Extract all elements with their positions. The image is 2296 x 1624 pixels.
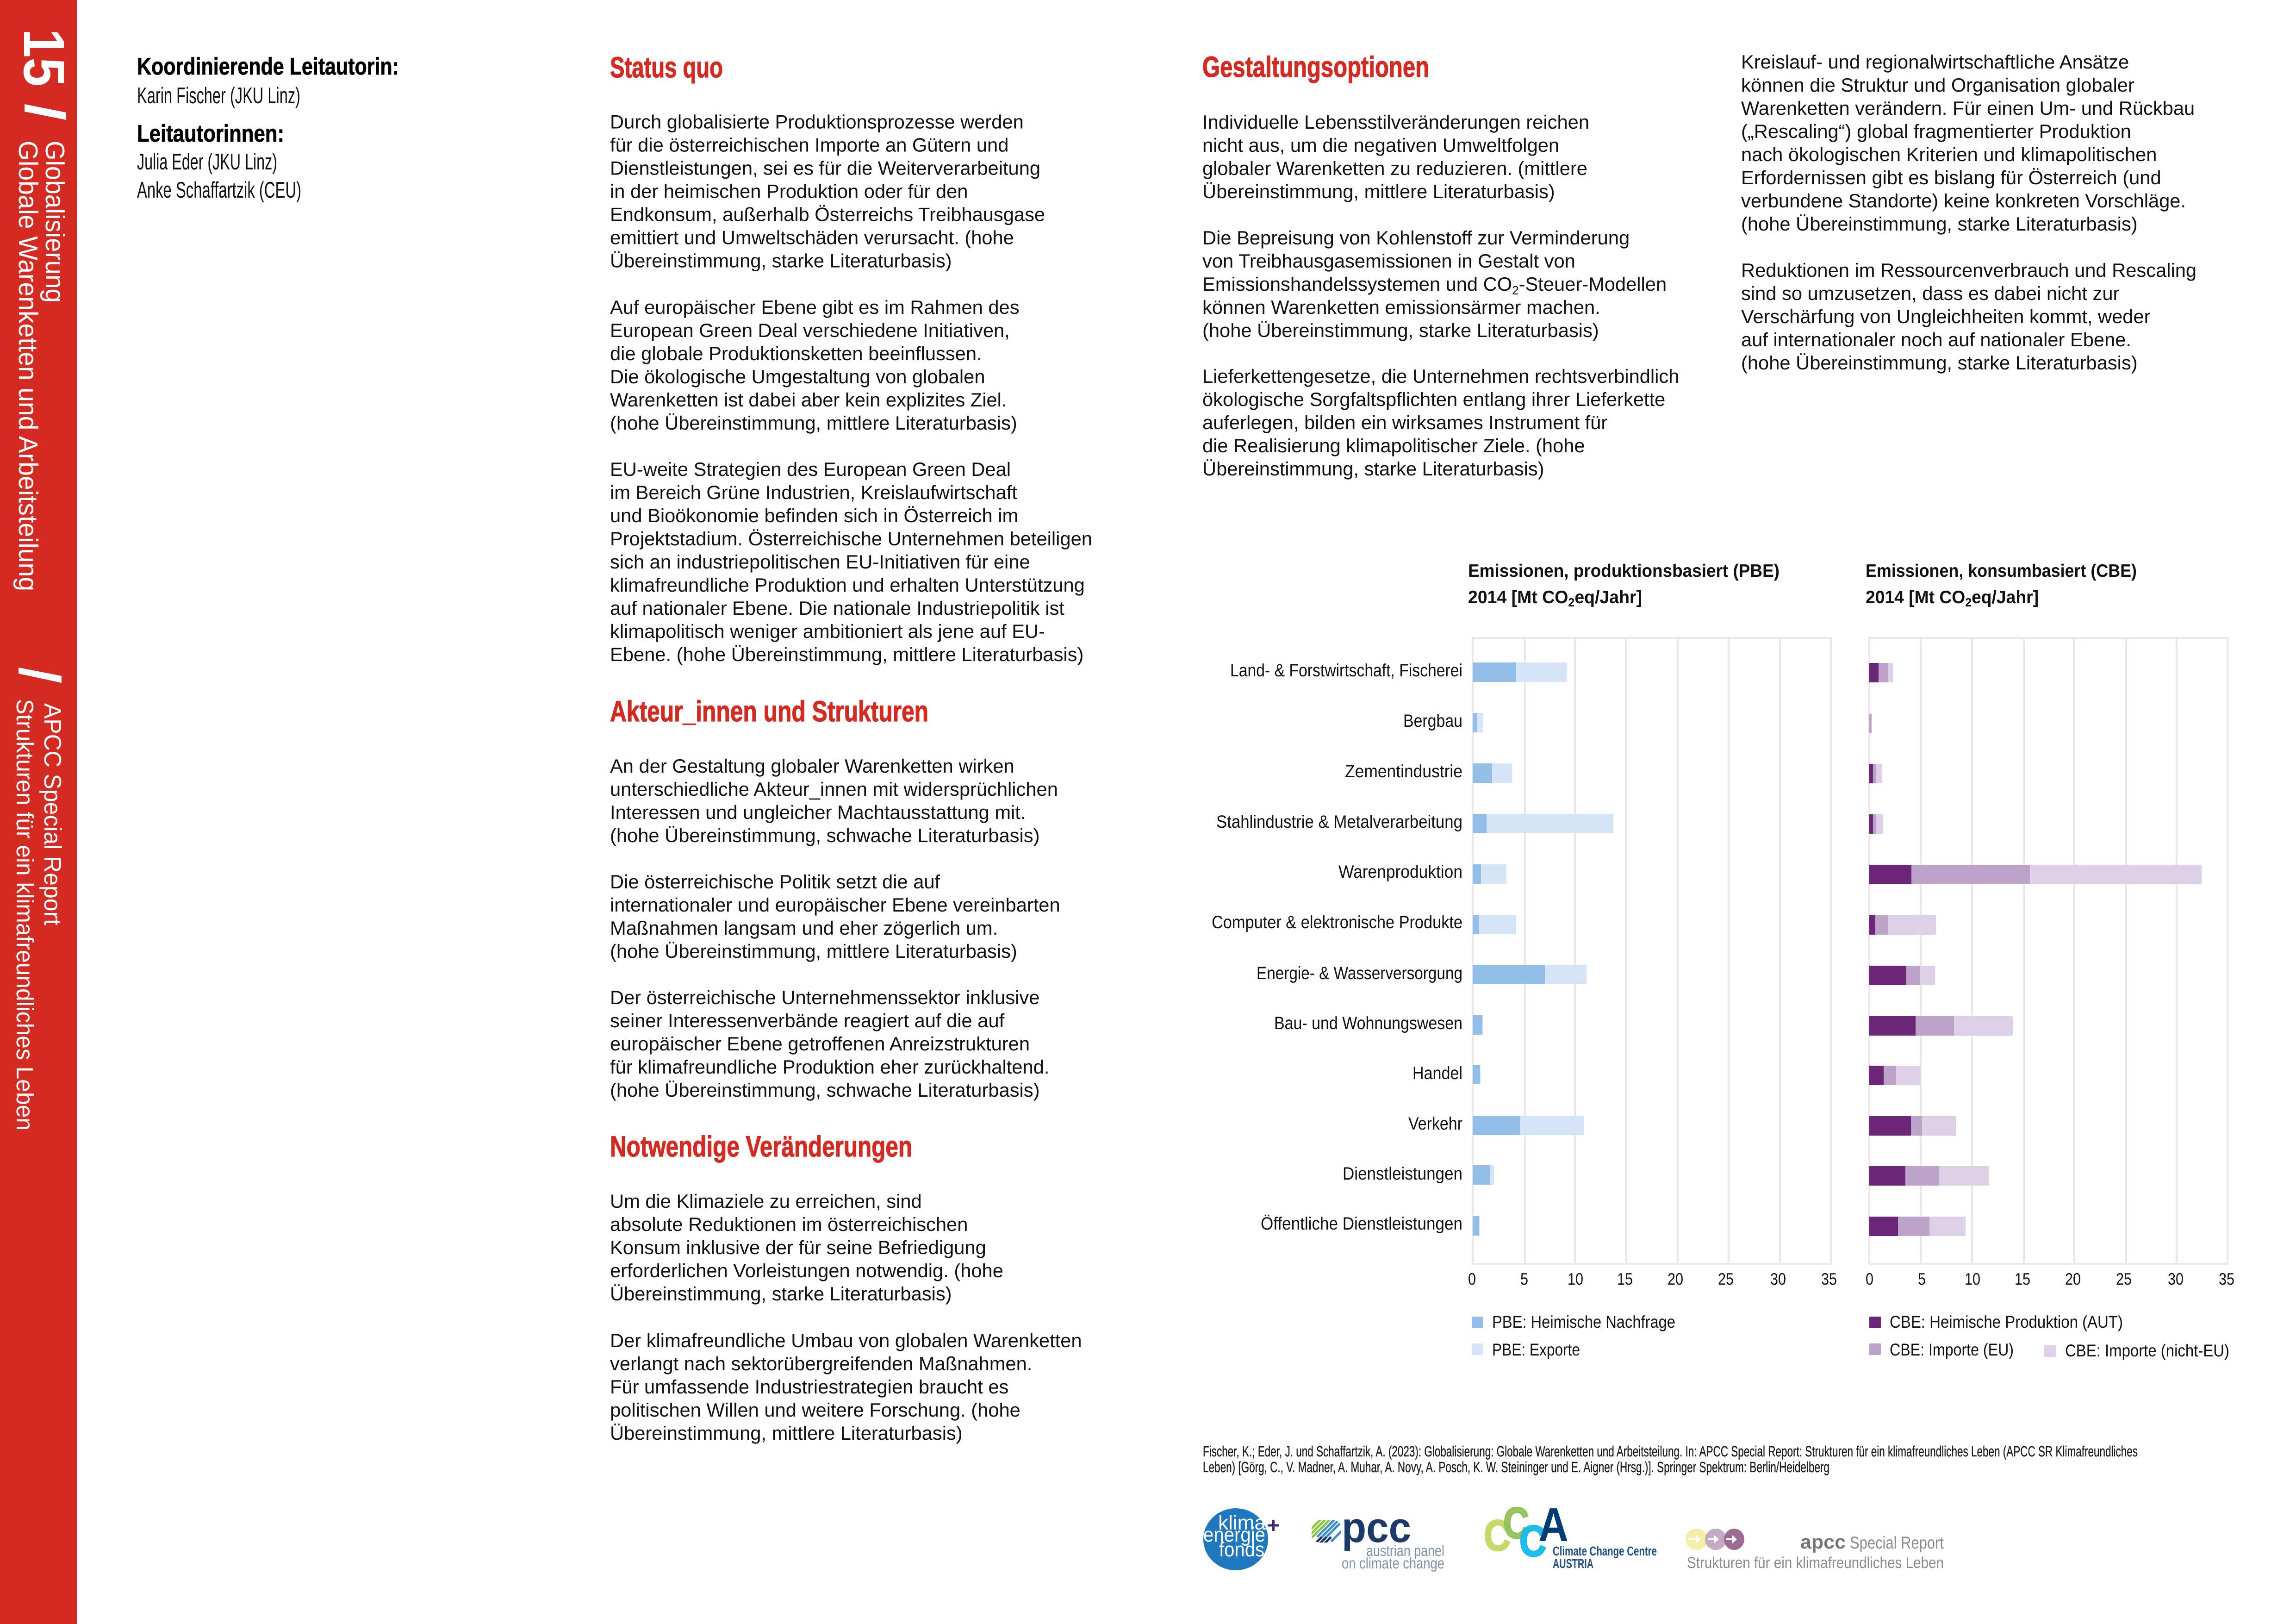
PBE legend: PBE: Heimische Nachfrage	[1492, 1312, 1675, 1331]
text block: circular economy paragraph: Erfordernissen gibt es bislang für Österreich (und	[1741, 167, 2161, 188]
text block: rescaling paragraph: auf internationaler noch auf nationaler Ebene.	[1741, 329, 2131, 350]
text block: actors paragraph 3: für klimafreundliche Produktion eher zurückhaltend.	[610, 1056, 1049, 1078]
PBE axis ticks: 35	[1821, 1269, 1837, 1288]
category labels	[1212, 661, 1462, 1234]
author: Anke Schaffartzik: Anke Schaffartzik (CEU)	[137, 178, 301, 203]
category labels: Stahlindustrie & Metalverarbeitung	[1216, 812, 1462, 832]
text block: rescaling paragraph: (hohe Übereinstimmung, starke Literaturbasis)	[1741, 352, 2138, 374]
text block: necessary changes paragraph 2: Der klimafreundliche Umbau von globalen Warenketten	[610, 1330, 1082, 1351]
CBE legend: CBE: Heimische Produktion (AUT)	[1890, 1312, 2123, 1331]
text block: status quo paragraph 3: Projektstadium. Österreichische Unternehmen beteiligen	[610, 528, 1092, 550]
logo: CCCA: C	[1519, 1517, 1546, 1565]
chart title line 2: 2014 [Mt CO	[1468, 587, 1572, 607]
text block: options paragraph 2: -Steuer-Modellen	[1519, 273, 1667, 295]
PBE bars: domestic demand	[1473, 662, 1545, 1236]
PBE bars: exports	[1473, 662, 1613, 1236]
text block: status quo paragraph 1: in der heimischen Produktion oder für den	[610, 181, 968, 202]
heading: coordinating lead author: Koordinierende Leitautorin:	[137, 53, 399, 80]
text block: status quo paragraph 1: für die österreichischen Importe an Gütern und	[610, 134, 1008, 156]
citation	[1203, 1443, 2138, 1475]
text block: status quo paragraph 3: klimafreundliche Produktion und erhalten Unterstützung	[610, 574, 1085, 596]
category labels: Computer & elektronische Produkte	[1212, 912, 1462, 932]
CBE bars: imports EU	[1869, 663, 2030, 1236]
logo: CCCA: AUSTRIA	[1553, 1556, 1593, 1571]
CBE axis ticks: 25	[2116, 1269, 2132, 1288]
author: Karin Fischer: Karin Fischer (JKU Linz)	[137, 83, 300, 108]
logo: Klima- und Energiefonds: fonds	[1219, 1538, 1264, 1561]
CBE axis ticks: 20	[2065, 1269, 2081, 1288]
logo: APCC Special Report: apcc	[1800, 1531, 1846, 1553]
text block: options paragraph 2: können Warenketten emissionsärmer machen.	[1202, 296, 1600, 318]
PBE axis ticks: 25	[1718, 1269, 1734, 1288]
text block: actors paragraph 2: Maßnahmen langsam und eher zögerlich um.	[610, 917, 998, 939]
slash divider lower	[19, 668, 62, 683]
PBE axis ticks: 10	[1568, 1269, 1583, 1288]
chart title line 2: 2	[1568, 595, 1574, 609]
logo: APCC: on climate change	[1342, 1555, 1444, 1572]
logo: CCCA: C	[1503, 1499, 1529, 1547]
text block: status quo paragraph 3: Ebene. (hohe Übereinstimmung, mittlere Literaturbasis)	[610, 643, 1083, 665]
heading: Status quo: Status quo	[610, 51, 723, 84]
text block: status quo paragraph 1: emittiert und Umweltschäden verursacht. (hohe	[610, 227, 1014, 248]
logo: APCC Special Report: Strukturen für ein klimafreundliches Leben	[1687, 1554, 1944, 1572]
heading: lead authors: Leitautorinnen:	[137, 120, 284, 147]
text block: status quo paragraph 2: Die ökologische Umgestaltung von globalen	[610, 366, 985, 387]
text block: necessary changes paragraph 2: Übereinstimmung, mittlere Literaturbasis)	[610, 1422, 963, 1444]
text block: necessary changes paragraph 1: Um die Klimaziele zu erreichen, sind	[610, 1190, 922, 1212]
text block: circular economy paragraph: (hohe Übereinstimmung, starke Literaturbasis)	[1741, 213, 2138, 235]
text block: options paragraph 2: (hohe Übereinstimmung, starke Literaturbasis)	[1202, 319, 1599, 341]
panel: text column one	[610, 51, 1098, 1444]
heading: Gestaltungsoptionen: Gestaltungsoptionen	[1202, 51, 1429, 83]
text block: options paragraph 1: nicht aus, um die negativen Umweltfolgen	[1202, 134, 1559, 156]
chapter number: 15	[12, 29, 76, 87]
CBE axis ticks: 0	[1866, 1269, 1873, 1288]
text block: options paragraph 1: Individuelle Lebensstilveränderungen reichen	[1202, 111, 1589, 133]
text block: status quo paragraph 3: klimapolitisch weniger ambitioniert als jene auf EU-	[610, 620, 1045, 642]
text block: status quo paragraph 2: Warenketten ist dabei aber kein explizites Ziel.	[610, 389, 1007, 411]
chapter title: Globalisierung	[40, 141, 70, 303]
text block: status quo paragraph 1: Endkonsum, außerhalb Österreichs Treibhausgase	[610, 204, 1045, 225]
text block: actors paragraph 1: Interessen und ungleicher Machtausstattung mit.	[610, 801, 1026, 823]
logo: Klima- und Energiefonds	[1203, 1508, 1279, 1570]
logo: APCC Special Report: Special Report	[1850, 1533, 1944, 1552]
category labels: Verkehr	[1408, 1114, 1462, 1134]
category labels: Öffentliche Dienstleistungen	[1261, 1214, 1462, 1234]
text block: necessary changes paragraph 2: Für umfassende Industriestrategien braucht es	[610, 1376, 1008, 1398]
text block: status quo paragraph 3: auf nationaler Ebene. Die nationale Industriepolitik ist	[610, 597, 1064, 619]
CBE axis ticks	[1866, 1269, 2234, 1288]
PBE axis ticks: 0	[1468, 1269, 1476, 1288]
text block: circular economy paragraph: nach ökologischen Kriterien und klimapolitischen	[1741, 144, 2157, 165]
logo: APCC Special Report	[1686, 1529, 1944, 1572]
text block: rescaling paragraph: sind so umzusetzen, dass es dabei nicht zur	[1741, 282, 2119, 304]
text block: options paragraph 2: 2	[1512, 283, 1519, 297]
text block: options paragraph 3: auferlegen, bilden ein wirksames Instrument für	[1202, 412, 1607, 433]
text block: actors paragraph 3: europäischer Ebene getroffenen Anreizstrukturen	[610, 1033, 1030, 1055]
text block: circular economy paragraph: verbundene Standorte) keine konkreten Vorschläge.	[1741, 190, 2186, 212]
chart title line 1: Emissionen, produktionsbasiert (PBE)	[1468, 561, 1780, 581]
chart title line 1: Emissionen, konsumbasiert (CBE)	[1866, 561, 2137, 581]
text block: actors paragraph 2: (hohe Übereinstimmung, mittlere Literaturbasis)	[610, 940, 1017, 962]
CBE axis ticks: 10	[1965, 1269, 1980, 1288]
category labels: Land- & Forstwirtschaft, Fischerei	[1230, 661, 1462, 681]
chart title line 2: 2014 [Mt CO	[1866, 587, 1970, 607]
text block: status quo paragraph 2: die globale Produktionsketten beeinflussen.	[610, 343, 982, 364]
PBE axis ticks	[1468, 1269, 1837, 1288]
report name: APCC Special Report	[39, 703, 66, 926]
heading: Akteur_innen und Strukturen: Akteur_innen und Strukturen	[610, 695, 928, 728]
text block: circular economy paragraph: Kreislauf- und regionalwirtschaftliche Ansätze	[1741, 51, 2129, 73]
citation: Leben) [Görg, C., V. Madner, A. Muhar, A. Novy, A. Posch, K. W. Steininger und E. Aigner (Hrsg.)]. Springer Spektrum: Berlin/Heidelberg	[1203, 1459, 1829, 1475]
category labels: Zementindustrie	[1345, 762, 1462, 781]
text block: actors paragraph 3: (hohe Übereinstimmung, schwache Literaturbasis)	[610, 1079, 1039, 1101]
text block: actors paragraph 1: (hohe Übereinstimmung, schwache Literaturbasis)	[610, 824, 1039, 846]
PBE legend: PBE: Exporte	[1492, 1340, 1580, 1359]
text block: actors paragraph 2: Die österreichische Politik setzt die auf	[610, 871, 940, 893]
CBE bars: domestic production	[1869, 663, 1916, 1236]
logo: APCC	[1312, 1519, 1444, 1572]
panel: red sidebar	[0, 0, 77, 1624]
text block: options paragraph 1: globaler Warenketten zu reduzieren. (mittlere	[1202, 157, 1587, 179]
text block: options paragraph 2: von Treibhausgasemissionen in Gestalt von	[1202, 250, 1575, 272]
category labels: Handel	[1412, 1063, 1462, 1083]
text block: actors paragraph 1: unterschiedliche Akteur_innen mit widersprüchlichen	[610, 778, 1058, 800]
CBE legend: CBE: Importe (EU)	[1890, 1340, 2014, 1359]
text block: necessary changes paragraph 1: absolute Reduktionen im österreichischen	[610, 1213, 968, 1235]
chart: production-based emissions (PBE)	[1212, 561, 1837, 1359]
PBE axis ticks: 20	[1668, 1269, 1683, 1288]
CBE axis ticks: 5	[1918, 1269, 1926, 1288]
text block: rescaling paragraph: Verschärfung von Ungleichheiten kommt, weder	[1741, 306, 2151, 327]
text block: options paragraph 2: Emissionshandelssystemen und CO	[1202, 273, 1512, 295]
text block: necessary changes paragraph 1: Konsum inklusive der für seine Befriedigung	[610, 1237, 986, 1258]
text block: actors paragraph 3: Der österreichische Unternehmenssektor inklusive	[610, 987, 1039, 1008]
chart: consumption-based emissions (CBE)	[1866, 561, 2234, 1360]
PBE axis ticks: 30	[1770, 1269, 1786, 1288]
text block: options paragraph 3: Übereinstimmung, starke Literaturbasis)	[1202, 458, 1544, 480]
chapter subtitle: Globale Warenketten und Arbeitsteilung	[13, 141, 43, 591]
slash divider top	[25, 104, 66, 120]
text block: status quo paragraph 2: European Green Deal verschiedene Initiativen,	[610, 319, 1010, 341]
heading: Notwendige Veränderungen: Notwendige Veränderungen	[610, 1131, 912, 1163]
text block: status quo paragraph 2: (hohe Übereinstimmung, mittlere Literaturbasis)	[610, 412, 1017, 434]
panel: text column three	[1741, 51, 2202, 374]
CBE bars: imports non-EU	[1869, 663, 2202, 1236]
PBE legend	[1472, 1312, 1675, 1359]
PBE axis ticks: 15	[1617, 1269, 1633, 1288]
text block: status quo paragraph 3: sich an industriepolitischen EU-Initiativen für eine	[610, 551, 1030, 573]
text block: necessary changes paragraph 1: erforderlichen Vorleistungen notwendig. (hohe	[610, 1260, 1003, 1281]
CBE axis ticks: 30	[2168, 1269, 2184, 1288]
text block: necessary changes paragraph 2: politischen Willen und weitere Forschung. (hohe	[610, 1399, 1020, 1421]
category labels: Dienstleistungen	[1343, 1164, 1462, 1184]
text block: options paragraph 1: Übereinstimmung, mittlere Literaturbasis)	[1202, 181, 1555, 202]
text block: status quo paragraph 3: im Bereich Grüne Industrien, Kreislaufwirtschaft	[610, 481, 1017, 503]
text block: options paragraph 3: Lieferkettengesetze, die Unternehmen rechtsverbindlich	[1202, 365, 1679, 387]
chart title line 2: 2	[1965, 595, 1972, 609]
logo: APCC: pcc	[1342, 1504, 1411, 1551]
CBE axis ticks: 35	[2219, 1269, 2234, 1288]
category labels: Bergbau	[1403, 711, 1462, 731]
chart title line 2: eq/Jahr]	[1972, 587, 2039, 607]
CBE legend	[1869, 1312, 2229, 1360]
category labels: Energie- & Wasserversorgung	[1257, 963, 1462, 983]
text block: necessary changes paragraph 2: verlangt nach sektorübergreifenden Maßnahmen.	[610, 1353, 1032, 1374]
text block: status quo paragraph 3: und Bioökonomie befinden sich in Österreich im	[610, 505, 1018, 526]
text block: options paragraph 2: Die Bepreisung von Kohlenstoff zur Verminderung	[1202, 227, 1630, 249]
text block: status quo paragraph 2: Auf europäischer Ebene gibt es im Rahmen des	[610, 296, 1020, 318]
logo: CCCA: A	[1538, 1498, 1568, 1551]
text block: circular economy paragraph: Warenketten verändern. Für einen Um- und Rückbau	[1741, 97, 2195, 119]
text block: status quo paragraph 3: EU-weite Strategien des European Green Deal	[610, 458, 1011, 480]
logo: CCCA: C	[1484, 1511, 1511, 1560]
logo: CCCA: Climate Change Centre	[1553, 1544, 1657, 1558]
PBE axis ticks: 5	[1520, 1269, 1528, 1288]
logo: Klima- und Energiefonds: energie	[1203, 1524, 1265, 1546]
text block: rescaling paragraph: Reduktionen im Ressourcenverbrauch und Rescaling	[1741, 259, 2196, 281]
text block: status quo paragraph 1: Durch globalisierte Produktionsprozesse werden	[610, 111, 1024, 132]
text block: circular economy paragraph: („Rescaling“) global fragmentierter Produktion	[1741, 120, 2131, 142]
category labels: Warenproduktion	[1338, 862, 1462, 882]
CBE axis ticks: 15	[2015, 1269, 2030, 1288]
panel: text column two	[1202, 51, 1685, 480]
author: Julia Eder: Julia Eder (JKU Linz)	[137, 150, 277, 175]
logo: CCCA	[1484, 1498, 1657, 1571]
text block: necessary changes paragraph 1: Übereinstimmung, starke Literaturbasis)	[610, 1283, 952, 1305]
report subtitle: Strukturen für ein klimafreundliches Leben	[11, 699, 38, 1131]
text block: circular economy paragraph: können die Struktur und Organisation globaler	[1741, 74, 2134, 96]
text block: actors paragraph 2: internationaler und europäischer Ebene vereinbarten	[610, 894, 1060, 916]
category labels: Bau- und Wohnungswesen	[1274, 1013, 1462, 1033]
chart title line 2: eq/Jahr]	[1574, 587, 1642, 607]
CBE legend: CBE: Importe (nicht-EU)	[2065, 1341, 2229, 1360]
text block: actors paragraph 3: seiner Interessenverbände reagiert auf die auf	[610, 1010, 1005, 1031]
text block: options paragraph 3: ökologische Sorgfaltspflichten entlang ihrer Lieferkette	[1202, 388, 1665, 410]
text block: status quo paragraph 1: Dienstleistungen, sei es für die Weiterverarbeitung	[610, 157, 1040, 179]
text block: options paragraph 3: die Realisierung klimapolitischer Ziele. (hohe	[1202, 435, 1585, 456]
text block: actors paragraph 1: An der Gestaltung globaler Warenketten wirken	[610, 755, 1014, 777]
panel: authors	[137, 53, 399, 203]
logo: Klima- und Energiefonds: klima	[1218, 1512, 1266, 1534]
logo: APCC: austrian panel	[1366, 1542, 1444, 1559]
text block: status quo paragraph 1: Übereinstimmung, starke Literaturbasis)	[610, 250, 952, 271]
